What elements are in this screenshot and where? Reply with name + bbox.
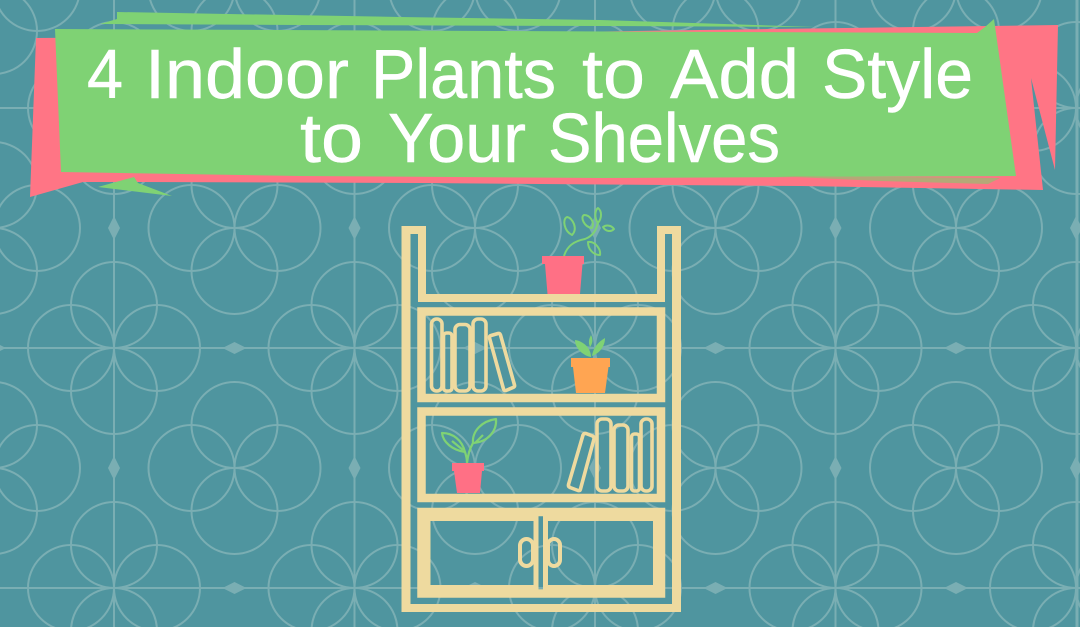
title text (87, 35, 973, 177)
title line 1: Indoor (145, 35, 349, 113)
title line 1: 4 (87, 35, 123, 113)
title banner (30, 12, 1058, 197)
title line 1: Style (822, 35, 973, 113)
cabinet doors (428, 518, 656, 588)
title line 2: Shelves (548, 99, 780, 177)
cabinet frame (422, 512, 661, 594)
vine (564, 208, 614, 256)
bookshelf illustration (402, 208, 681, 612)
pot (542, 256, 584, 294)
left door handle (520, 539, 533, 566)
right door handle (548, 539, 560, 566)
banner: top green brush stroke (100, 12, 815, 27)
right door (546, 518, 656, 588)
pot (571, 358, 610, 393)
title line 2: Your (388, 99, 526, 177)
title line 1 (87, 35, 973, 113)
books upper shelf (432, 319, 515, 391)
top shelf compartment (422, 312, 661, 398)
shelf outer frame (402, 226, 681, 612)
title line 1: Plants (371, 35, 556, 113)
title line 2: to (300, 99, 363, 177)
banner: right wisp (774, 176, 1000, 184)
title line 2 (300, 99, 780, 177)
plant: orange pot (571, 335, 610, 393)
pot (452, 463, 484, 493)
plant: pink pot on top (542, 208, 614, 294)
title line 1: Add (670, 35, 799, 113)
leaves (442, 419, 496, 463)
banner: bottom green brush stroke (98, 177, 172, 196)
plant: pink pot on lower shelf (442, 419, 496, 493)
leaves (575, 335, 605, 357)
books lower shelf (568, 419, 652, 491)
banner: pink backing shape (30, 25, 1058, 197)
title line 1: to (582, 35, 645, 113)
middle shelf compartment (422, 412, 661, 498)
left door (428, 518, 536, 588)
banner: green main panel (55, 19, 1016, 178)
